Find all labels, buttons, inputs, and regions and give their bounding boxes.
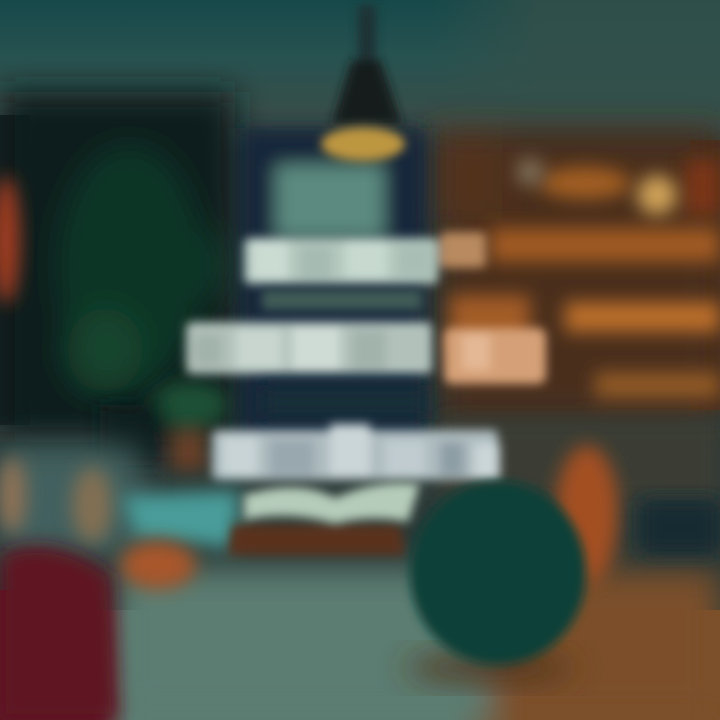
teal cloth: [122, 490, 240, 548]
fingers: [0, 457, 112, 543]
hanging lamp: [321, 5, 405, 161]
shelf lamp glow: [516, 158, 677, 215]
lamp glow: [321, 127, 405, 161]
shelf body: [432, 130, 720, 420]
open book: [228, 483, 420, 555]
red object at left edge: [0, 176, 20, 304]
small potted plant: [100, 381, 228, 470]
right dark box: [640, 500, 720, 555]
book cover: [228, 525, 405, 555]
blurred line one: [244, 232, 486, 284]
dark wall base: [0, 115, 30, 425]
left lower area: [0, 445, 140, 555]
ball shadow: [405, 654, 575, 682]
band under line one: [262, 290, 422, 310]
floor base: [0, 610, 720, 720]
chair top: [0, 546, 118, 720]
right wooden shelves: [432, 130, 720, 500]
blurred line three: [212, 424, 500, 480]
book pages: [244, 483, 420, 524]
orange vase: [555, 445, 619, 585]
green cactus ball: [410, 481, 586, 665]
tabletop: [115, 568, 720, 720]
chair base: [0, 590, 95, 720]
plant foliage: [0, 92, 235, 442]
red armchair: [0, 546, 118, 720]
shelf items: [440, 160, 720, 500]
orange object: [120, 541, 196, 589]
blurred line two: [186, 322, 546, 384]
dark window panel behind stack: [240, 128, 426, 448]
shelf edge base: [690, 140, 720, 410]
ceiling right tint: [0, 0, 720, 115]
band under line two: [262, 385, 427, 419]
left dark wall with plant: [0, 92, 235, 442]
lamp cord and shade: [332, 5, 402, 125]
